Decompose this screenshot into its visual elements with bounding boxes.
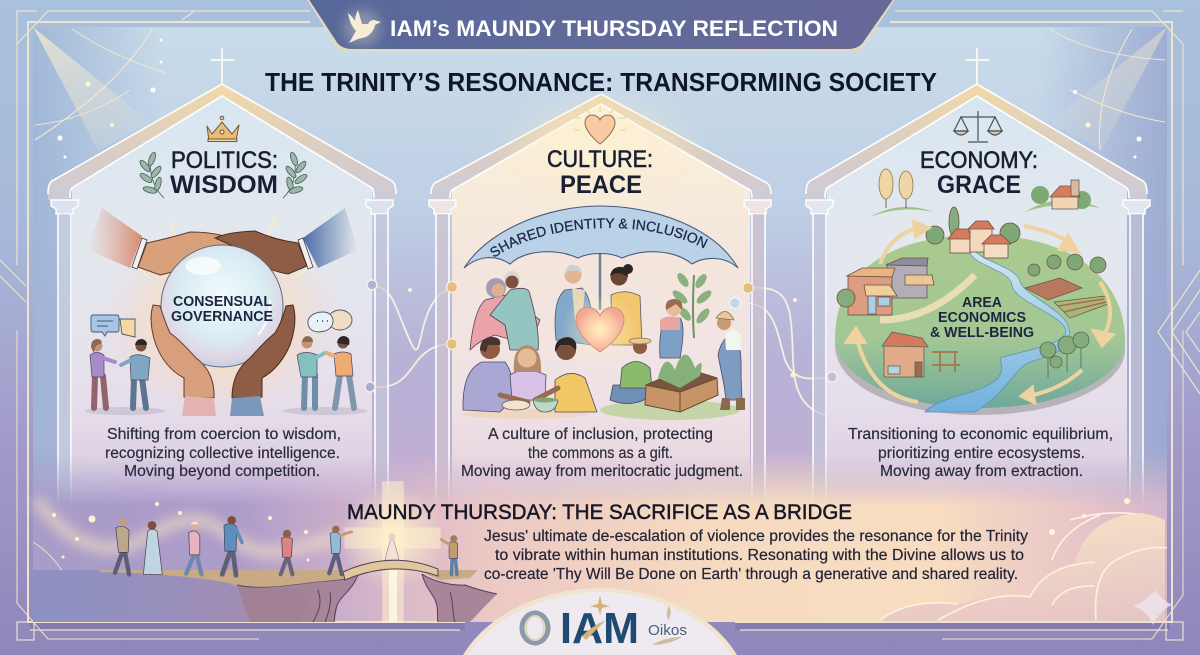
heart — [562, 292, 638, 368]
person 4 — [222, 516, 242, 575]
logo text: IAM: IAM — [560, 604, 639, 653]
icon: cross on roof — [211, 48, 234, 84]
description: culture: Moving away from meritocratic judgment. — [461, 463, 743, 480]
glowing cross — [340, 482, 444, 622]
person 1 — [115, 518, 129, 574]
cycle arrows — [847, 222, 1112, 402]
bottom right clouds — [880, 498, 1172, 625]
description: economy: Transitioning to economic equilibrium, — [848, 426, 1113, 443]
description: culture: the commons as a gift. — [528, 445, 673, 462]
logo text: Oikos: Oikos — [648, 623, 687, 639]
icon: right laurel — [283, 151, 308, 198]
person 5 — [281, 530, 292, 574]
logo leaf — [652, 606, 682, 645]
description: politics: Moving beyond competition. — [124, 463, 320, 480]
connector lines between panels — [370, 285, 832, 415]
ground — [33, 570, 313, 622]
description: culture — [461, 426, 743, 480]
panel shape: culture house — [429, 94, 771, 510]
crystal orb — [161, 245, 283, 367]
people: left pair — [85, 339, 165, 415]
wave of light — [36, 500, 340, 552]
umbrella: shared identity and inclusion: SHARED IDENTITY & INCLUSION — [490, 218, 708, 257]
panel shape: politics house — [48, 84, 396, 510]
path to shops — [880, 275, 975, 320]
left cliff ledge — [100, 570, 358, 587]
heading: culture — [547, 146, 653, 199]
right ledge — [418, 570, 478, 580]
sparkles — [52, 502, 310, 562]
heading: politics: POLITICS: — [171, 147, 278, 174]
people walking — [115, 516, 458, 575]
description: economy — [848, 426, 1113, 480]
panel: culture — [428, 93, 772, 498]
bottom body text: Jesus' ultimate de-escalation of violence provides the resonance for the Trinity — [484, 528, 1028, 545]
icon: wheat hill — [870, 169, 934, 217]
people: gardeners with raised bed — [600, 271, 745, 420]
crystal orb: GOVERNANCE — [171, 309, 273, 325]
main title: THE TRINITY’S RESONANCE: TRANSFORMING SOCIETY — [265, 67, 937, 97]
logo ring — [522, 613, 548, 643]
island label: ECONOMICS — [938, 310, 1026, 326]
people: shared meal — [463, 337, 597, 419]
icon: farmhouse hill — [1025, 180, 1100, 212]
connector node: politics bottom — [365, 382, 375, 392]
illustration: consensual governance — [85, 208, 377, 416]
panel: economy — [806, 48, 1150, 510]
panel shape: economy house — [806, 84, 1150, 510]
icon: scales — [954, 111, 1002, 142]
logo badge — [463, 588, 737, 655]
heading: economy — [920, 147, 1038, 199]
bottom body text: to vibrate within human institutions. Resonating with the Divine allows us to — [495, 547, 1024, 564]
bottom body text — [484, 528, 1028, 583]
heading: politics: WISDOM — [170, 171, 278, 199]
left cliff — [237, 575, 358, 622]
umbrella: shared identity and inclusion — [464, 206, 738, 310]
icon: dove — [344, 10, 381, 46]
connector nodes: culture right — [730, 282, 754, 308]
people: elder and woman — [555, 264, 642, 345]
right cliff — [422, 574, 497, 622]
icon: heart with rays — [490, 85, 710, 215]
crystal orb: CONSENSUAL — [173, 294, 272, 310]
connector nodes — [408, 288, 797, 378]
people: right pair — [283, 336, 367, 415]
figure: Jesus on bridge — [385, 534, 399, 560]
header banner — [306, 0, 896, 52]
heading: culture: PEACE — [560, 171, 642, 199]
connector node: politics top — [367, 280, 377, 290]
description: economy: prioritizing entire ecosystems. — [878, 445, 1085, 462]
heading: politics — [170, 147, 278, 199]
header title: IAM’s MAUNDY THURSDAY REFLECTION — [390, 16, 838, 41]
icon: crown — [207, 116, 239, 142]
people: embracing pair — [470, 271, 540, 350]
connector nodes: culture left — [446, 282, 458, 350]
logo swoosh and star — [582, 595, 610, 640]
speech bubbles: left — [91, 315, 135, 337]
island label: & WELL-BEING — [930, 325, 1034, 341]
connector node: economy — [827, 372, 837, 382]
lower hands — [151, 305, 295, 416]
person 2 — [143, 521, 162, 574]
island label — [930, 295, 1034, 341]
corner light rays: top right — [1050, 27, 1167, 158]
bridge — [343, 560, 438, 580]
bottom heading: MAUNDY THURSDAY: THE SACRIFICE AS A BRIDGE — [347, 501, 852, 524]
farm fields — [1025, 254, 1108, 318]
person 6 — [329, 526, 352, 574]
trees and farmhouse — [882, 332, 1089, 378]
description: politics: Shifting from coercion to wisdom, — [107, 426, 341, 443]
heading: culture: CULTURE: — [547, 146, 653, 173]
bottom band scene: sacrifice as a bridge — [33, 482, 497, 622]
icon: left laurel — [138, 151, 164, 198]
speech bubbles: right — [308, 310, 352, 332]
shops — [837, 258, 934, 315]
village — [926, 207, 1020, 258]
illustration: area economics island — [835, 207, 1125, 415]
icon: cross on economy roof — [966, 48, 989, 84]
description: culture: A culture of inclusion, protecting — [488, 426, 713, 443]
top hands — [87, 208, 358, 275]
description: politics: recognizing collective intelligence. — [105, 445, 340, 462]
person 7 — [441, 535, 458, 575]
heading: economy: GRACE — [937, 171, 1021, 199]
heading: economy: ECONOMY: — [920, 147, 1038, 174]
description: economy: Moving away from extraction. — [880, 463, 1083, 480]
person 3 — [186, 522, 202, 574]
bottom body text: co-create 'Thy Will Be Done on Earth' through a generative and shared reality. — [484, 566, 1018, 583]
island label: AREA — [962, 295, 1003, 311]
river — [925, 252, 1070, 412]
description: politics — [105, 426, 341, 480]
corner light rays: top left — [33, 27, 166, 158]
